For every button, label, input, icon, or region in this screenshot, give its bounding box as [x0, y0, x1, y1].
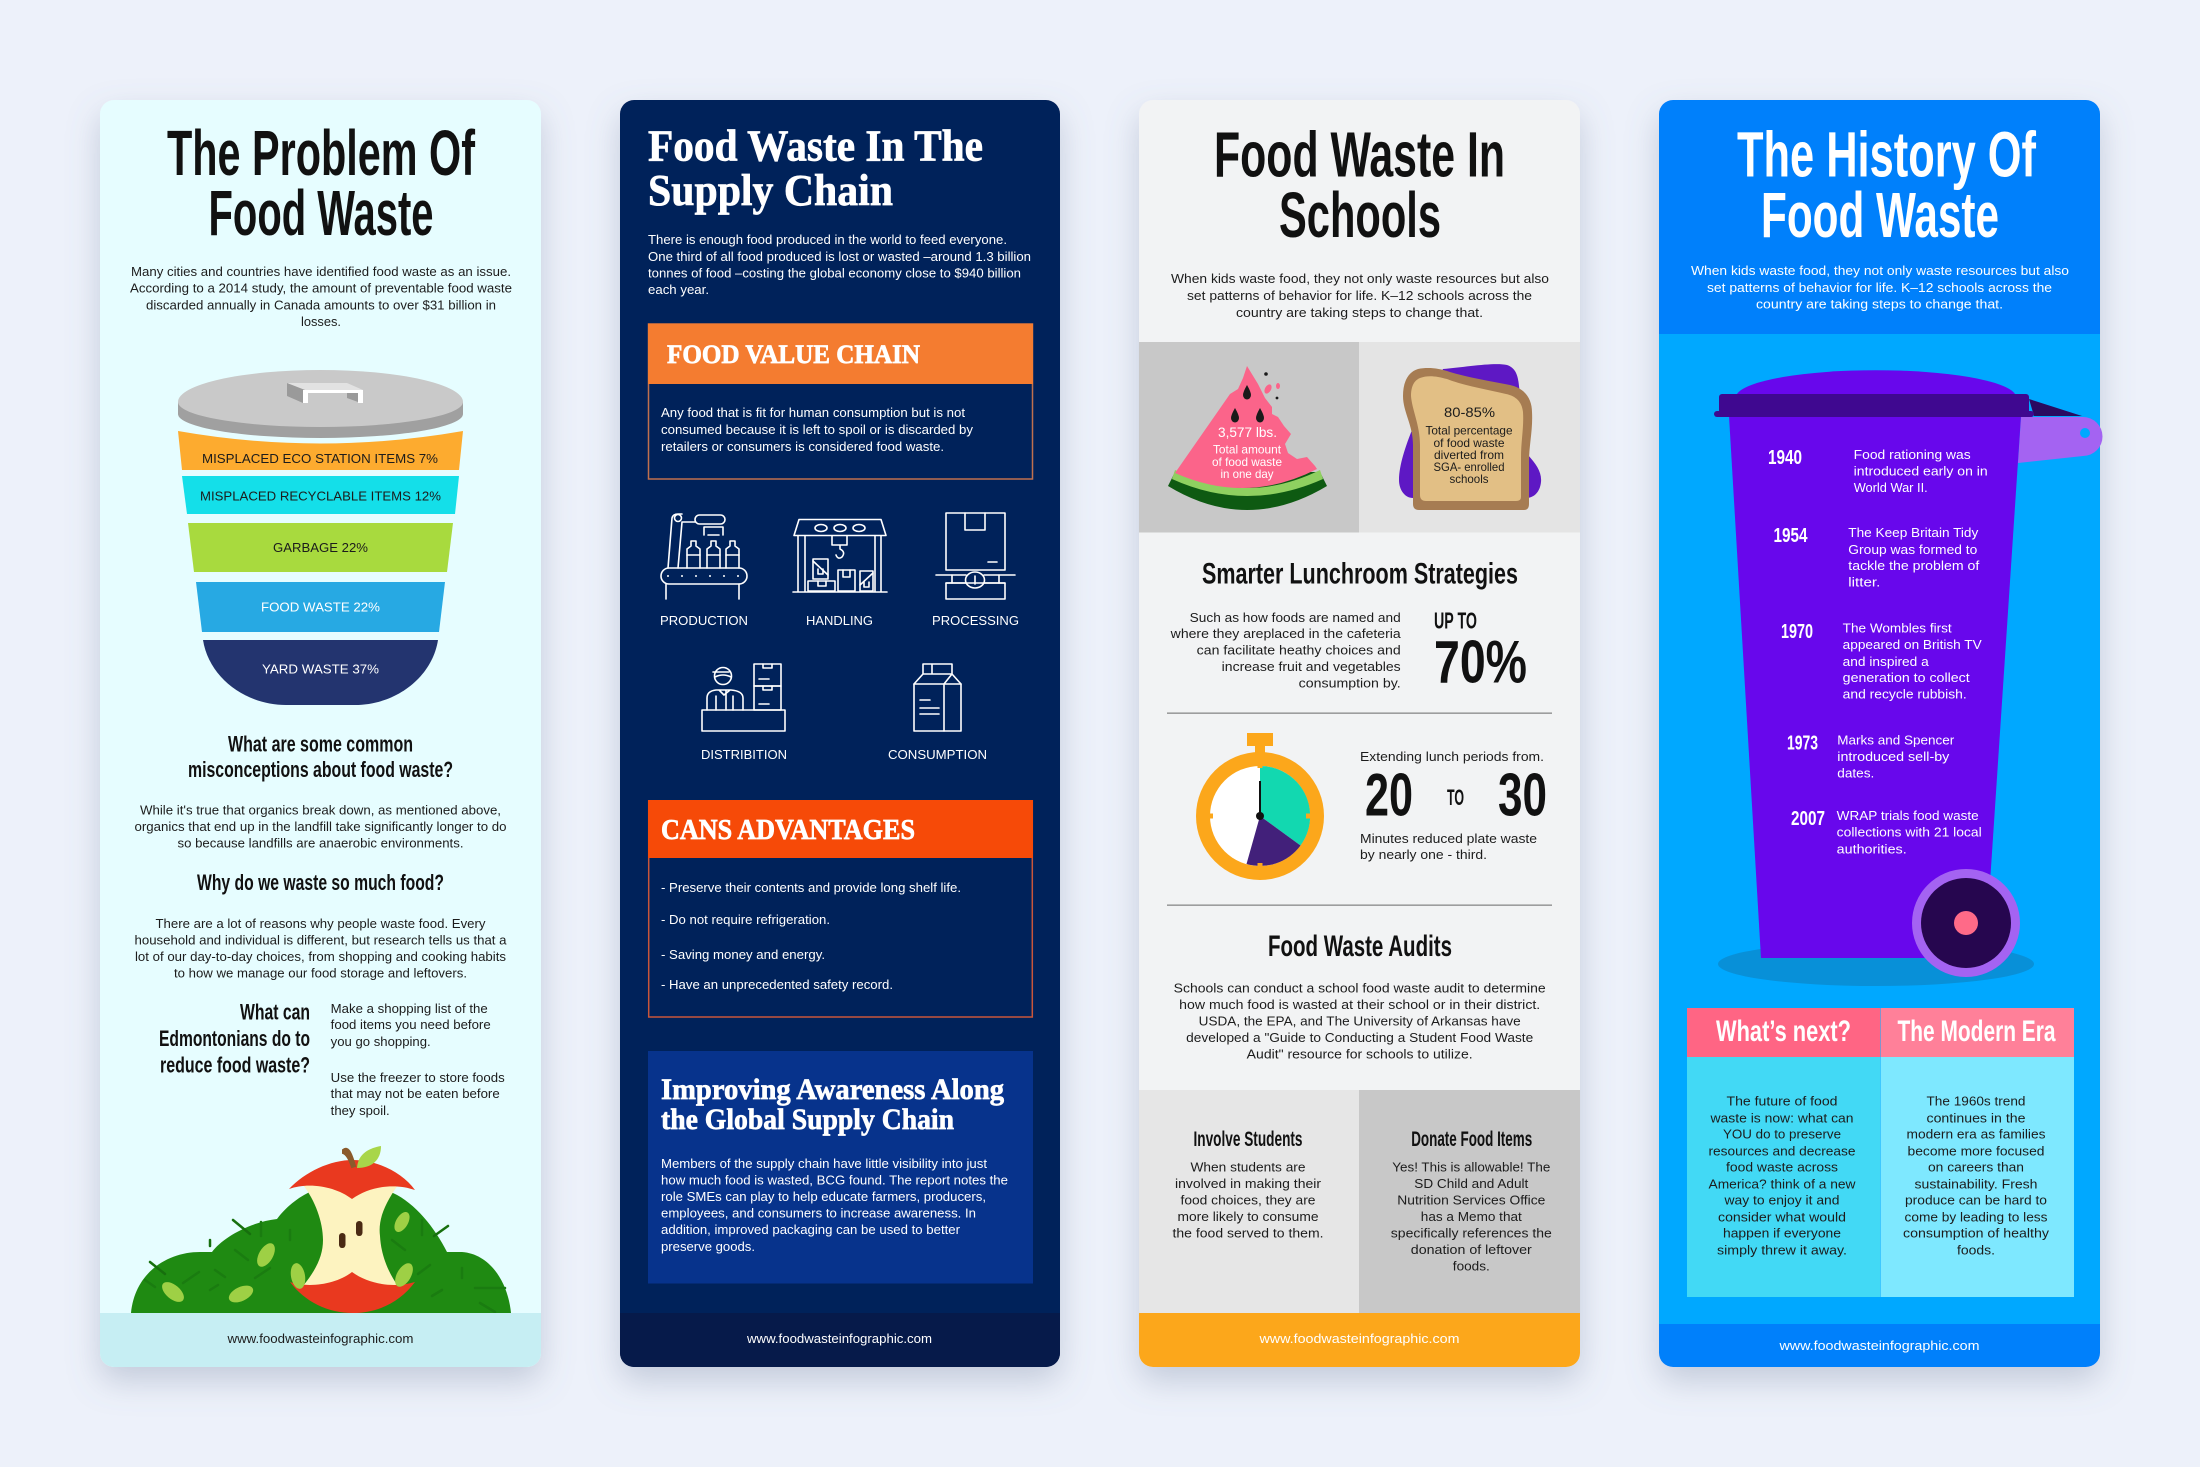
- stat tile: watermelon: [1139, 342, 1359, 532]
- tile: donate food items: [1359, 1090, 1580, 1313]
- intro text: When kids waste food, they not only waste resources but also: [1691, 263, 2069, 278]
- stat: lunch periods: by nearly one - third.: [1360, 847, 1487, 862]
- intro text: [130, 264, 512, 329]
- intro text: set patterns of behavior for life. K–12 schools across the: [1707, 280, 2052, 295]
- box: improving awareness: Improving Awareness Along: [661, 1073, 1004, 1106]
- stat: lunch periods: Minutes reduced plate waste: [1360, 831, 1537, 846]
- bin lid: [178, 370, 463, 438]
- tile: donate food items: foods.: [1453, 1259, 1490, 1274]
- stat: lunch periods: Extending lunch periods from.: [1360, 749, 1544, 764]
- box: food value chain: consumed because it is left to spoil or is discarded by: [661, 422, 973, 437]
- box: improving awareness: the Global Supply Chain: [661, 1103, 954, 1136]
- tile: donate food items: SD Child and Adult: [1414, 1176, 1529, 1191]
- intro text: Many cities and countries have identified food waste as an issue.: [131, 264, 511, 279]
- column: the modern era: [1880, 1008, 2074, 1297]
- stat tile: toast: diverted from: [1434, 448, 1504, 462]
- tile: donate food items: Yes! This is allowable! The: [1392, 1160, 1550, 1175]
- column: the modern era: become more focused: [1908, 1143, 2044, 1158]
- timeline: 1940: Food rationing was: [1854, 447, 1971, 462]
- apple core: [289, 1146, 415, 1313]
- column: what's next: America? think of a new: [1708, 1176, 1856, 1191]
- timeline: 1954: 1954: [1774, 525, 1808, 547]
- box: improving awareness: how much food is wasted, BCG found. The report notes the: [661, 1172, 1008, 1188]
- stat: lunch periods: 30: [1498, 762, 1547, 829]
- band: garbage: GARBAGE 22%: [273, 540, 368, 555]
- title: The History Of: [1737, 119, 2036, 191]
- band: garbage: [188, 523, 453, 572]
- heading: misconceptions: What are some common: [228, 732, 413, 757]
- tile: involve students: Involve Students: [1194, 1128, 1302, 1151]
- text: lunchroom strategies: [1170, 610, 1402, 690]
- intro text: set patterns of behavior for life. K–12 schools across the: [1187, 288, 1532, 303]
- box: improving awareness: preserve goods.: [661, 1239, 755, 1254]
- icon: production: [660, 514, 748, 628]
- timeline: 1973: [1787, 732, 1955, 781]
- band: yard waste: [203, 640, 438, 705]
- text: tips: they spoil.: [331, 1103, 390, 1118]
- text: audits: USDA, the EPA, and The University of Arkansas have: [1199, 1014, 1521, 1029]
- illustration: wheelie bin: [1714, 370, 2102, 986]
- heading: what can Edmontonians do: Edmontonians do to: [159, 1026, 310, 1051]
- text: misconceptions: organics that end up in the landfill take significantly longer to do: [134, 819, 507, 834]
- band: food waste: FOOD WASTE 22%: [261, 600, 380, 615]
- icon: distribution: DISTRIBITION: [701, 747, 787, 762]
- heading: misconceptions: [188, 732, 453, 782]
- heading: smarter lunchroom strategies: Smarter Lunchroom Strategies: [1202, 558, 1518, 591]
- column: the modern era: continues in the: [1926, 1110, 2026, 1125]
- text: why waste: [134, 916, 507, 981]
- column: the modern era: The 1960s trend: [1926, 1094, 2026, 1109]
- intro text: country are taking steps to change that.: [1236, 305, 1483, 320]
- text: audits: how much food is wasted at their school or in their district.: [1179, 997, 1540, 1012]
- column: what's next: The future of food: [1726, 1094, 1838, 1109]
- timeline: 2007: collections with 21 local: [1837, 825, 1982, 840]
- column: the modern era: sustainability. Fresh: [1914, 1176, 2038, 1191]
- timeline: 1954: litter.: [1848, 575, 1880, 590]
- title: Supply Chain: [648, 166, 893, 215]
- timeline: 1954: The Keep Britain Tidy: [1848, 525, 1979, 540]
- tile: donate food items: specifically references the: [1391, 1226, 1552, 1241]
- panel: the history of food waste: [1659, 100, 2102, 1367]
- text: lunchroom strategies: Such as how foods are named and: [1190, 610, 1401, 625]
- box: cans advantages: [648, 800, 1033, 1017]
- intro text: tonnes of food –costing the global economy close to $940 billion: [648, 266, 1021, 280]
- timeline: 1973: Marks and Spencer: [1837, 732, 1955, 748]
- intro text: discarded annually in Canada amounts to over $31 billion in: [146, 297, 496, 312]
- stat: lunch periods: 20: [1365, 762, 1413, 829]
- column: the modern era: modern era as families: [1906, 1127, 2046, 1142]
- text: lunchroom strategies: where they areplaced in the cafeteria: [1170, 626, 1402, 641]
- heading: what can Edmontonians do: What can: [240, 1000, 310, 1025]
- intro text: According to a 2014 study, the amount of preventable food waste: [130, 281, 512, 296]
- chart: waste bin composition: [178, 370, 463, 705]
- tile: donate food items: has a Memo that: [1421, 1209, 1522, 1224]
- text: why waste: to how we manage our food storage and leftovers.: [174, 966, 467, 981]
- tile: involve students: the food served to them.: [1172, 1226, 1324, 1241]
- timeline: 1970: appeared on British TV: [1843, 637, 1982, 652]
- column: the modern era: produce can be hard to: [1905, 1193, 2047, 1208]
- box: food value chain: Any food that is fit for human consumption but is not: [661, 405, 965, 420]
- column: what's next: consider what would: [1718, 1209, 1846, 1224]
- timeline: 1940: World War II.: [1854, 480, 1928, 495]
- intro text: each year.: [648, 282, 709, 297]
- heading: why waste: Why do we waste so much food?: [197, 870, 444, 895]
- icon: production: PRODUCTION: [660, 613, 748, 628]
- box: cans advantages: - Have an unprecedented safety record.: [661, 977, 893, 992]
- column: what's next: YOU do to preserve: [1723, 1127, 1841, 1142]
- box: food value chain: FOOD VALUE CHAIN: [667, 340, 920, 369]
- footer: [100, 1313, 541, 1367]
- icon: distribution: [701, 664, 787, 762]
- title: Food Waste: [1761, 179, 1999, 251]
- footer: [620, 1313, 1060, 1367]
- column: the modern era: on careers than: [1928, 1160, 2024, 1175]
- intro text: There is enough food produced in the world to feed everyone.: [648, 232, 1007, 247]
- column: what's next: simply threw it away.: [1717, 1242, 1847, 1257]
- intro text: [1171, 271, 1549, 320]
- panel: food waste in schools: [1139, 100, 1580, 1367]
- text: tips: you go shopping.: [331, 1034, 431, 1049]
- box: improving awareness: [648, 1051, 1033, 1284]
- column: the modern era: come by leading to less: [1904, 1209, 2048, 1224]
- column: what's next: What’s next?: [1716, 1015, 1851, 1048]
- column: what's next: resources and decrease: [1708, 1143, 1856, 1158]
- timeline: 1973: dates.: [1837, 766, 1874, 781]
- stat tile: toast: [1359, 342, 1580, 532]
- column: the modern era: consumption of healthy: [1903, 1226, 2050, 1241]
- text: tips: [331, 1001, 505, 1118]
- timeline: 2007: WRAP trials food waste: [1837, 808, 1979, 823]
- tile: involve students: When students are: [1190, 1160, 1306, 1175]
- icon: stopwatch: [1196, 733, 1324, 880]
- title: Schools: [1279, 179, 1441, 251]
- tile: involve students: food choices, they are: [1180, 1193, 1316, 1208]
- stat tile: toast: Total percentage: [1426, 424, 1513, 438]
- small leaves: [159, 1209, 417, 1306]
- footer: www.foodwasteinfographic.com: [746, 1331, 932, 1346]
- timeline: 1940: [1768, 447, 1988, 495]
- title: [1737, 119, 2036, 251]
- title: [1214, 119, 1505, 251]
- box: improving awareness: employees, and consumers to increase awareness. In: [661, 1205, 976, 1220]
- timeline: 1970: and inspired a: [1843, 654, 1930, 669]
- band: recyclable items: MISPLACED RECYCLABLE ITEMS 12%: [200, 489, 441, 504]
- title: [648, 122, 983, 215]
- timeline: 1970: and recycle rubbish.: [1843, 687, 1967, 702]
- title: The Problem Of: [167, 117, 475, 189]
- stat tile: watermelon: of food waste: [1212, 455, 1282, 469]
- column: the modern era: foods.: [1957, 1242, 1995, 1257]
- title: Food Waste In: [1214, 119, 1505, 191]
- text: audits: [1174, 981, 1546, 1062]
- text: audits: developed a "Guide to Conducting a Student Food Waste: [1186, 1030, 1533, 1045]
- text: lunchroom strategies: can facilitate heathy choices and: [1197, 643, 1401, 658]
- column: what's next: food waste across: [1726, 1160, 1839, 1175]
- box: food value chain: [648, 324, 1033, 479]
- intro text: [1691, 263, 2069, 312]
- band: eco station items: [178, 431, 463, 470]
- intro text: When kids waste food, they not only waste resources but also: [1171, 271, 1549, 286]
- heading: misconceptions: misconceptions about food waste?: [188, 757, 453, 782]
- box: improving awareness: Members of the supply chain have little visibility into just: [661, 1156, 987, 1171]
- text: lunchroom strategies: consumption by.: [1299, 676, 1401, 690]
- band: recyclable items: [182, 476, 459, 514]
- icon: consumption: CONSUMPTION: [888, 747, 987, 762]
- text: tips: that may not be eaten before: [331, 1086, 500, 1101]
- illustration: apple core on compost pile: [131, 1146, 511, 1313]
- band: yard waste: YARD WASTE 37%: [262, 662, 379, 677]
- icon: handling: HANDLING: [806, 613, 873, 628]
- stat tile: watermelon: 3,577 lbs.: [1218, 424, 1277, 440]
- tile: involve students: involved in making their: [1175, 1176, 1322, 1191]
- footer: [1139, 1313, 1580, 1367]
- stat tile: toast: schools: [1450, 472, 1488, 486]
- stat: up to 70%: [1434, 608, 1527, 696]
- text: audits: Audit" resource for schools to utilize.: [1247, 1047, 1473, 1062]
- footer: www.foodwasteinfographic.com: [226, 1331, 414, 1346]
- title: [167, 117, 475, 249]
- text: why waste: There are a lot of reasons why people waste food. Every: [156, 916, 486, 931]
- timeline: 2007: [1791, 808, 1982, 856]
- heading: what can Edmontonians do: reduce food waste?: [160, 1053, 310, 1078]
- box: improving awareness: role SMEs can play to help educate farmers, producers,: [661, 1189, 986, 1204]
- box: cans advantages: - Do not require refrigeration.: [661, 912, 830, 927]
- column: what's next: happen if everyone: [1723, 1226, 1841, 1241]
- icon: processing: [932, 513, 1019, 628]
- box: improving awareness: addition, improved packaging can be used to better: [661, 1222, 961, 1237]
- intro text: losses.: [301, 314, 341, 329]
- text: misconceptions: While it's true that organics break down, as mentioned above,: [140, 803, 501, 818]
- stat tile: toast: 80-85%: [1444, 404, 1495, 420]
- timeline: 1940: 1940: [1768, 447, 1802, 469]
- column: the modern era: The Modern Era: [1898, 1015, 2056, 1048]
- stat: lunch periods: [1360, 749, 1547, 862]
- title: Food Waste: [208, 177, 434, 249]
- title: Food Waste In The: [648, 122, 983, 170]
- timeline: 1973: 1973: [1787, 732, 1818, 754]
- stat: up to 70%: UP TO: [1434, 608, 1477, 634]
- timeline: 1954: Group was formed to: [1848, 542, 1977, 557]
- tile: donate food items: Nutrition Services Office: [1397, 1193, 1545, 1208]
- heading: food waste audits: Food Waste Audits: [1268, 930, 1452, 963]
- timeline: 1954: tackle the problem of: [1848, 558, 1980, 573]
- tile: involve students: more likely to consume: [1178, 1209, 1318, 1224]
- timeline: 2007: 2007: [1791, 808, 1825, 830]
- column: what's next: waste is now: what can: [1709, 1110, 1854, 1125]
- heading: what can Edmontonians do: [159, 1000, 310, 1078]
- panel: the problem of food waste: [100, 100, 541, 1367]
- text: tips: food items you need before: [331, 1017, 491, 1032]
- band: eco station items: MISPLACED ECO STATION ITEMS 7%: [202, 451, 438, 466]
- box: cans advantages: - Saving money and energy.: [661, 947, 825, 962]
- timeline: 1940: introduced early on in: [1854, 464, 1988, 478]
- text: misconceptions: [134, 803, 507, 850]
- timeline: 2007: authorities.: [1837, 842, 1907, 856]
- timeline: 1970: The Wombles first: [1843, 620, 1952, 636]
- footer: www.foodwasteinfographic.com: [1778, 1338, 1980, 1353]
- text: misconceptions: so because landfills are anaerobic environments.: [178, 836, 464, 850]
- intro text: country are taking steps to change that.: [1756, 297, 2003, 312]
- icon: handling: [793, 520, 887, 628]
- text: why waste: household and individual is different, but research tells us that a: [134, 933, 507, 948]
- text: lunchroom strategies: increase fruit and vegetables: [1222, 659, 1401, 674]
- text: audits: Schools can conduct a school food waste audit to determine: [1174, 981, 1546, 996]
- box: cans advantages: - Preserve their contents and provide long shelf life.: [661, 880, 961, 895]
- stat tile: watermelon: Total amount: [1213, 443, 1282, 457]
- text: tips: Use the freezer to store foods: [331, 1070, 505, 1085]
- tile: involve students: [1139, 1090, 1359, 1313]
- panel: food waste in the supply chain: [620, 100, 1060, 1367]
- stat: lunch periods: TO: [1447, 785, 1464, 810]
- tile: donate food items: Donate Food Items: [1411, 1128, 1532, 1151]
- footer: www.foodwasteinfographic.com: [1258, 1331, 1460, 1346]
- column: what's next: way to enjoy it and: [1723, 1193, 1840, 1208]
- icon: processing: PROCESSING: [932, 613, 1019, 628]
- text: tips: Make a shopping list of the: [331, 1001, 488, 1016]
- stat tile: toast: of food waste: [1434, 436, 1505, 450]
- column: what's next: [1687, 1008, 1880, 1297]
- timeline: 1970: 1970: [1781, 621, 1813, 643]
- stat: up to 70%: 70%: [1434, 628, 1527, 696]
- tile: donate food items: donation of leftover: [1411, 1242, 1533, 1257]
- timeline: 1970: generation to collect: [1843, 670, 1970, 685]
- intro text: [648, 232, 1031, 297]
- icon: consumption: [888, 664, 987, 762]
- band: food waste: [196, 582, 445, 632]
- timeline: 1970: [1781, 620, 1982, 702]
- stat tile: watermelon: in one day: [1220, 467, 1274, 481]
- stat tile: toast: SGA- enrolled: [1434, 460, 1504, 474]
- box: cans advantages: CANS ADVANTAGES: [661, 814, 915, 846]
- text: why waste: lot of our day-to-day choices, from shopping and cooking habits: [135, 949, 507, 964]
- box: food value chain: retailers or consumers is considered food waste.: [661, 439, 944, 454]
- timeline: 1973: introduced sell-by: [1837, 749, 1950, 764]
- timeline: 1954: [1774, 525, 1980, 590]
- intro text: One third of all food produced is lost or wasted –around 1.3 billion: [648, 249, 1031, 264]
